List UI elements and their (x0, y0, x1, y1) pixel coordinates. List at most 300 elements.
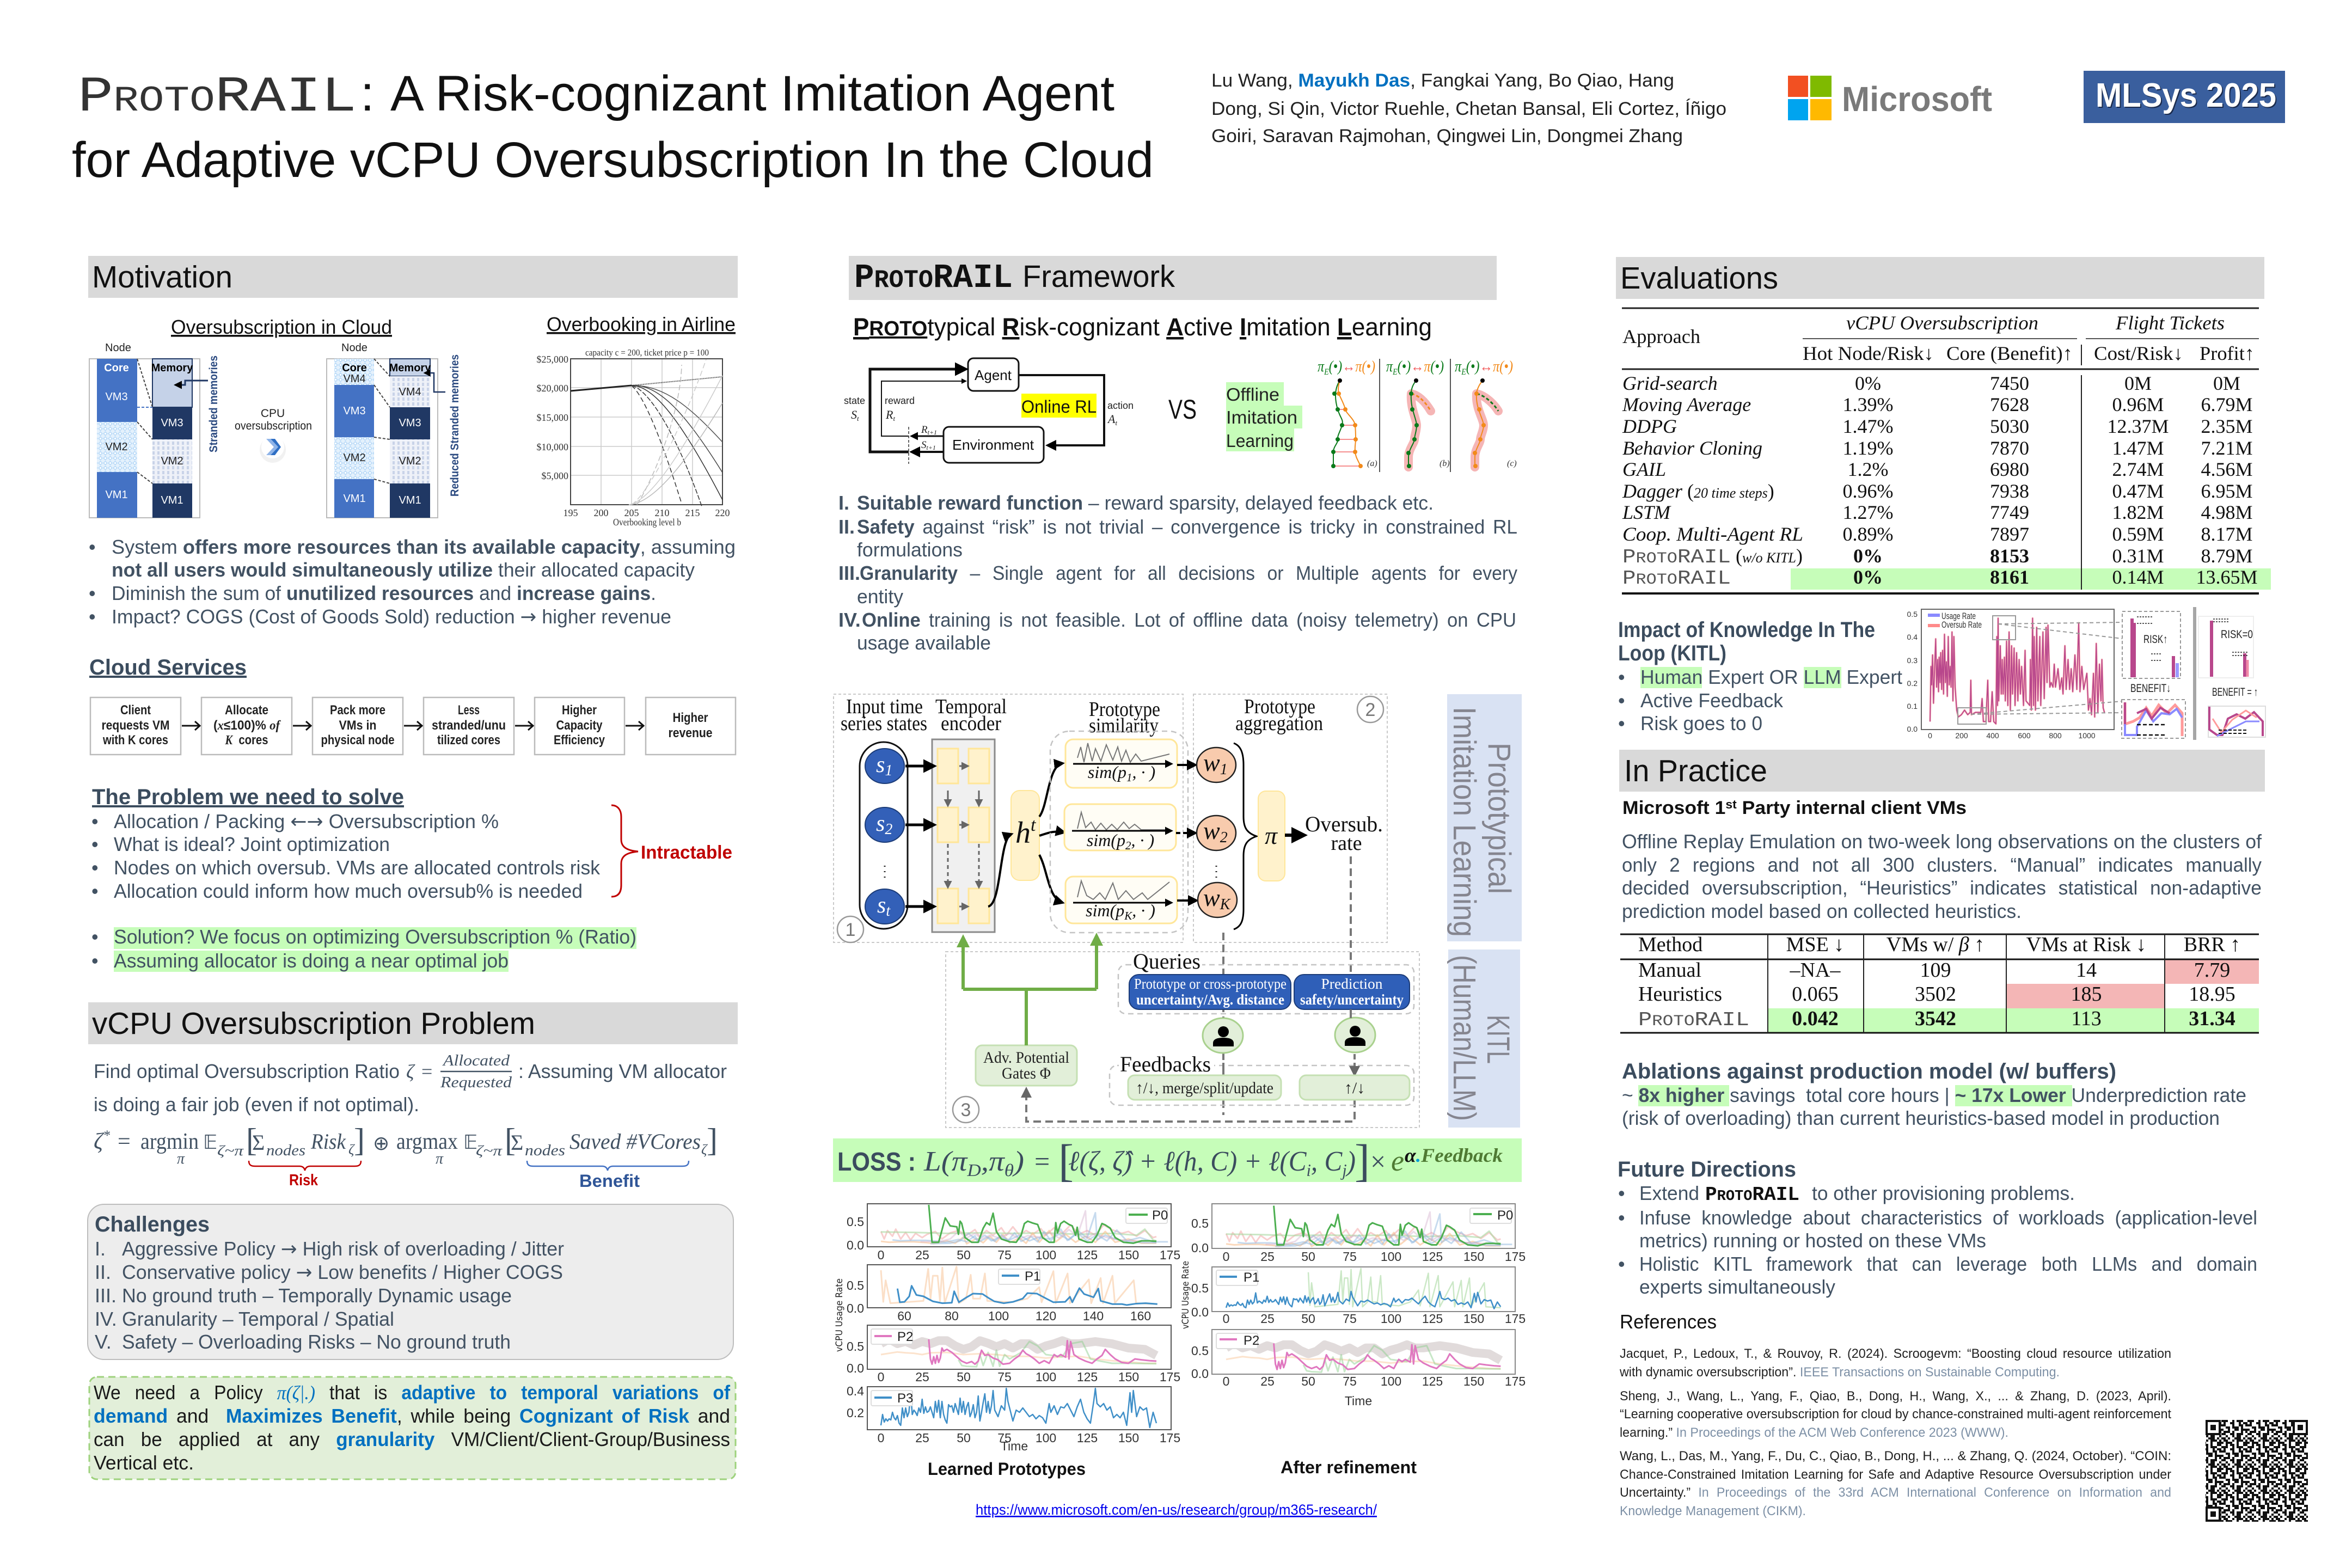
callout: policy requirement: Vertical etc. (94, 1451, 194, 1474)
chart: usage vs oversub rate: 600 (2018, 731, 2031, 740)
text block: future directions: to other provisioning problems. (1812, 1182, 2075, 1204)
table: in practice results: 18.95 (2189, 983, 2235, 1006)
text block: problem definition: : Assuming VM allocator (518, 1060, 727, 1082)
diagram: prototypical imitation learning architecture: sim(p (1086, 901, 1124, 920)
formula: objective: [ (505, 1122, 516, 1158)
title: for Adaptive vCPU Oversubscription In the Cloud (72, 132, 1154, 188)
diagram: oversubscription in cloud: Reduced Stranded memories (449, 354, 461, 497)
chart: refined P0: 0 (1223, 1250, 1229, 1264)
diagram: prototypical imitation learning architecture: t (1031, 815, 1037, 835)
chart group: learned prototypes: Learned Prototypes (928, 1459, 1086, 1479)
chart: P1: 100 (988, 1309, 1009, 1323)
diagram: prototypical imitation learning architecture: , · ) (1132, 762, 1155, 782)
chart: refined P2: 175 (1505, 1374, 1526, 1388)
table: evaluation results: 0.59M (2112, 523, 2164, 545)
diagram: online RL loop: t (893, 414, 895, 422)
diagram: oversubscription in cloud: Oversubscription in Cloud (171, 316, 392, 338)
heading: in practice (1619, 750, 2265, 792)
table: evaluation results: 1.39% (1842, 394, 1894, 415)
chart: refined P0: 25 (1260, 1250, 1275, 1264)
label: offline imitation learning: Imitation (1226, 407, 1297, 427)
table: in practice results: MSE ↓ (1786, 933, 1844, 956)
diagram: oversubscription in cloud: Node (105, 342, 131, 354)
flow: cloud services chain: Capacity (556, 718, 603, 733)
diagram: imitation trajectories: (•) (1466, 358, 1480, 375)
flow: cloud services chain: Client (120, 703, 151, 718)
chart: refined P1: P1 (1244, 1270, 1259, 1285)
chart group: after refinement: vCPU Usage Rate (1180, 1261, 1191, 1329)
table: evaluation results: 2.74M (2112, 458, 2164, 480)
table: evaluation results: Grid-search (1622, 372, 1718, 394)
chart: refined P2: 150 (1463, 1374, 1484, 1388)
formula: LOSS: LOSS : (837, 1148, 916, 1177)
table: in practice results: VMs at Risk ↓ (2026, 933, 2146, 956)
chart: usage vs oversub rate: 0.0 (1907, 725, 1918, 733)
text block: impact of KITL: Risk goes to 0 (1640, 712, 1762, 734)
table: evaluation results: 0M (2213, 372, 2240, 394)
chart: refined P0: 75 (1343, 1250, 1357, 1264)
label: offline imitation learning (1226, 382, 1302, 451)
flow: cloud services chain: Less (458, 703, 480, 718)
panel: evaluations (1616, 257, 2271, 740)
chart: refined P2: 25 (1260, 1374, 1275, 1388)
annotation: risk brace: Risk (289, 1172, 318, 1189)
diagram: imitation trajectories: (c) (1507, 459, 1517, 468)
text block: offline replay description: decided oversubscription, “Heuristics” indicates statistical non-adaptive (1622, 877, 2262, 899)
formula: objective: nodes (266, 1142, 305, 1159)
text block: framework challenges: Online training is not feasible. Lot of offline data (noisy telemetry) on CPU (862, 609, 1516, 631)
diagram: knowledge in the loop: Feedbacks (1120, 1052, 1211, 1076)
table: evaluation results: Profit↑ (2200, 342, 2255, 364)
text block: references: Jacquet, P., Ledoux, T., & Rouvoy, R. (2024). Scroogevm: “Boosting cloud resource utilization (1620, 1346, 2171, 1361)
chart: refined P0: 100 (1381, 1250, 1401, 1264)
diagram: prototypical imitation learning architecture: sim(p (1087, 830, 1125, 850)
text block: motivation bullets: • (89, 605, 96, 628)
chart: P2: 0 (878, 1370, 884, 1384)
table: in practice results: 113 (2071, 1007, 2102, 1030)
title: PROTO RAIL (78, 69, 357, 126)
diagram: prototypical imitation learning architecture: w (1203, 749, 1220, 776)
chart group: learned prototypes (834, 1204, 1180, 1479)
diagram: prototypical imitation learning architecture: 1 (1126, 771, 1132, 784)
chart: refined P1: 25 (1260, 1312, 1275, 1326)
label: KITL (1447, 950, 1520, 1128)
diagram: prototypical imitation learning architecture: Oversub. (1305, 812, 1383, 836)
chart: P1: 120 (1036, 1309, 1056, 1323)
text block: references: learning.” In Proceedings of the ACM Web Conference 2023 (WWW). (1620, 1425, 2008, 1440)
table: evaluation results: Coop. Multi-Agent RL (1622, 523, 1803, 545)
chart: overbooking in airline: $20,000 (537, 383, 568, 394)
chart: refined P0: 175 (1505, 1250, 1526, 1264)
formula: LOSS: π (989, 1146, 1003, 1177)
table: evaluation results: vCPU Oversubscription (1846, 312, 2038, 334)
chart: usage vs oversub rate: 0.1 (1907, 702, 1918, 710)
chart: overbooking in airline: 200 (593, 507, 609, 518)
diagram: prototypical imitation learning architecture: , · ) (1131, 830, 1154, 850)
chart: refined P0: 150 (1463, 1250, 1484, 1264)
chart: overbooking in airline: 220 (715, 507, 730, 518)
chart: refined P1: 0.5 (1191, 1281, 1209, 1295)
chart: overbooking in airline: $15,000 (537, 412, 568, 423)
formula: LOSS: ℓ(ζ, ζ̂) + ℓ(h, C) + ℓ(C (1068, 1146, 1307, 1177)
chart group: learned prototypes: vCPU Usage Rate (834, 1278, 845, 1352)
diagram: prototypical imitation learning architecture: 1 (846, 920, 855, 940)
diagram: online RL loop: S (921, 439, 927, 451)
flow: cloud services chain: Higher (562, 703, 597, 718)
chart: zoomed risk and benefit after KITL (2198, 616, 2265, 737)
text block: future directions: Future Directions (1618, 1157, 1796, 1181)
diagram: oversubscription in cloud: VM3 (343, 405, 366, 417)
table: evaluation results: Core (Benefit)↑ (1946, 342, 2073, 364)
diagram: prototypical imitation learning architecture: s (876, 752, 885, 777)
chart: P3: 125 (1077, 1431, 1098, 1445)
formula: objective: ζ (348, 1142, 355, 1157)
table: in practice results: Manual (1638, 959, 1701, 982)
diagram: prototypical imitation learning architecture: K (1124, 909, 1132, 922)
flow: cloud services chain: VMs in (339, 718, 377, 733)
chart: P0: 0.5 (847, 1215, 864, 1229)
chart: P3: 100 (1036, 1431, 1056, 1445)
panel: challenges: IV. (95, 1308, 117, 1330)
chart: P2: 50 (957, 1370, 971, 1384)
table: evaluation results: 7450 (1990, 372, 2029, 394)
chart group: after refinement (1180, 1204, 1526, 1477)
chart group: after refinement: Time (1345, 1394, 1372, 1408)
text block: future directions: metrics) running or hosted on these VMs (1639, 1229, 1986, 1252)
formula: objective: ζ~π (217, 1143, 244, 1159)
formula: objective: * (103, 1128, 110, 1143)
text block: impact of KITL: • (1618, 666, 1625, 688)
table: in practice results: 185 (2071, 983, 2102, 1006)
table: evaluation results: 0M (2124, 372, 2152, 394)
table: in practice results: 109 (1920, 959, 1951, 982)
diagram: online RL loop: Agent (975, 367, 1012, 383)
diagram: online RL loop: action (1107, 400, 1134, 411)
diagram: prototypical imitation learning architecture: aggregation (1235, 712, 1323, 735)
chart: refined P1: 125 (1422, 1312, 1443, 1326)
table: evaluation results: 4.56M (2201, 458, 2253, 480)
text block: solution highlights: Solution? We focus on optimizing Oversubscription % (Ratio) (114, 926, 636, 948)
diagram: oversubscription in cloud: Memory (389, 362, 431, 374)
chart: P2: 0.0 (847, 1361, 864, 1375)
table: evaluation results: 7938 (1990, 480, 2029, 502)
title: : (360, 66, 375, 121)
panel: challenges (88, 1204, 733, 1359)
text block: problem definition (94, 1052, 727, 1116)
diagram: prototypical imitation learning architecture: 2 (1365, 700, 1375, 720)
text block: motivation bullets: • (89, 536, 96, 558)
chart: usage vs oversub rate (1907, 609, 2122, 740)
heading: evaluations (1616, 257, 2264, 299)
chart: refined P2 (1191, 1330, 1526, 1388)
formula: objective: 𝔼 (463, 1131, 477, 1154)
table: evaluation results: Approach (1622, 326, 1700, 347)
diagram: imitation trajectories: π (1455, 358, 1462, 375)
text block: references: “Learning cooperative oversubscription for cloud by chance-constrained multi-agent reinforcement (1620, 1407, 2171, 1422)
diagram: prototypical imitation learning architecture: Prototype (1244, 695, 1315, 718)
diagram: prototypical imitation learning architecture: w (1203, 817, 1220, 844)
formula: LOSS: i (1307, 1160, 1311, 1180)
panel: vCPU oversubscription problem (88, 1002, 738, 1479)
formula: LOSS: = (1034, 1146, 1050, 1177)
diagram: oversubscription in cloud: Stranded memories (207, 356, 220, 452)
text block: future directions: • (1618, 1182, 1625, 1204)
table: evaluation results: 7870 (1990, 437, 2029, 459)
chart: P3: 150 (1118, 1431, 1139, 1445)
panel: challenges: Safety – Overloading Risks – No ground truth (122, 1331, 511, 1353)
text block: solution highlights: • (91, 926, 99, 948)
chart: usage vs oversub rate: 800 (2049, 731, 2062, 740)
formula: objective: [ (246, 1122, 257, 1158)
chart: usage vs oversub rate: 0 (1928, 731, 1932, 740)
chart: P3: 25 (915, 1431, 929, 1445)
formula: objective: π (177, 1150, 185, 1167)
flow: cloud services chain: Allocate (225, 703, 268, 718)
text block: impact of KITL: • (1618, 689, 1625, 712)
diagram: prototypical imitation learning architecture: 2 (1220, 829, 1228, 846)
diagram: prototypical imitation learning architecture: Temporal (935, 695, 1007, 718)
diagram: imitation trajectories: (a) (1367, 459, 1377, 468)
chart: refined P1: 100 (1381, 1312, 1401, 1326)
text block: problem definition: = (421, 1061, 432, 1082)
diagram: knowledge in the loop: Adv. Potential (983, 1049, 1069, 1067)
diagram: prototypical imitation learning architecture: sim(p (1088, 762, 1126, 782)
text block: framework challenges: entity (857, 585, 903, 608)
panel: challenges: Granularity – Temporal / Spatial (122, 1308, 394, 1330)
text block: framework challenges: I. (838, 492, 849, 514)
text block: framework challenges (838, 492, 1517, 654)
authors: Dong, Si Qin, Victor Ruehle, Chetan Bansal, Eli Cortez, Íñigo (1211, 99, 1726, 119)
text block: the problem we need to solve: Allocation could inform how much oversub% is needed (114, 880, 583, 902)
formula: LOSS: e (1391, 1144, 1404, 1177)
diagram: online RL loop: t+1 (928, 428, 937, 436)
table: in practice results: –NA– (1790, 959, 1841, 982)
heading: vCPU oversubscription problem: vCPU Oversubscription Problem (92, 1006, 535, 1041)
text block: future directions: • (1618, 1253, 1625, 1275)
chart: P0: 150 (1118, 1248, 1139, 1262)
chart: refined P1: 175 (1505, 1312, 1526, 1326)
text block: future directions: PROTORAIL (1705, 1184, 1799, 1206)
table: evaluation results: 0% (1853, 545, 1883, 567)
formula: objective: argmin (140, 1129, 199, 1154)
table: evaluation results: 6980 (1990, 458, 2029, 480)
chart: refined P1: 50 (1301, 1312, 1315, 1326)
text block: solution highlights (91, 926, 636, 972)
panel: challenges: III. (95, 1284, 117, 1307)
subheading: first party VMs: st (1725, 798, 1737, 811)
text block: solution highlights: Assuming allocator is doing a near optimal job (114, 950, 509, 972)
text block: references: Uncertainty.” In Proceedings of the 33rd ACM International Conference on Information and (1620, 1485, 2171, 1500)
formula: LOSS: , (1311, 1146, 1318, 1177)
table: in practice results: BRR ↑ (2184, 933, 2240, 956)
text block: references: Chance-Constrained Imitation Learning for Safe and Adaptive Resource Oversubscription under (1620, 1467, 2171, 1482)
diagram: prototypical imitation learning architecture (834, 694, 1387, 942)
table: evaluation results: 12.37M (2107, 415, 2169, 437)
formula: LOSS: θ (1004, 1160, 1014, 1180)
label: KITL: KITL (1480, 1015, 1516, 1064)
formula: objective: ζ~π (476, 1143, 503, 1159)
table: evaluation results: 0.96% (1842, 480, 1894, 502)
diagram: knowledge in the loop: Gates Φ (1002, 1064, 1051, 1082)
diagram: oversubscription in cloud: VM3 (161, 417, 183, 429)
chart: P1: 140 (1083, 1309, 1104, 1323)
panel: ProtoRAIL framework (833, 256, 1526, 1518)
label: offline imitation learning: Offline (1226, 384, 1279, 405)
formula: objective: 𝔼 (203, 1131, 217, 1154)
table: evaluation results: 8.17M (2201, 523, 2253, 545)
text block: the problem we need to solve: • (91, 856, 99, 879)
diagram: knowledge in the loop: uncertainty/Avg. distance (1136, 991, 1284, 1008)
diagram: imitation trajectories: ↔π(•) (1480, 358, 1516, 375)
chart: refined P2: 0.0 (1191, 1367, 1209, 1381)
text block: the problem we need to solve: Allocation / Packing ←→ Oversubscription % (114, 810, 499, 833)
flow: cloud services chain: Higher (673, 710, 708, 725)
table: evaluation results: (w/o KITL) (1736, 545, 1803, 567)
text block: framework challenges: Granularity – Single agent for all decisions or Multiple agents for every (860, 562, 1517, 584)
heading: vCPU oversubscription problem (88, 1002, 738, 1044)
text block: future directions: • (1618, 1206, 1625, 1229)
chart: overbooking in airline: Overbooking level b (613, 517, 681, 528)
formula: objective: nodes (525, 1142, 565, 1159)
diagram: imitation trajectories: (•) (1398, 358, 1411, 375)
table: in practice results: 31.34 (2189, 1007, 2235, 1030)
diagram: online RL loop: R (886, 408, 893, 421)
text block: framework challenges: III. (838, 562, 860, 584)
table: evaluation results: 6.79M (2201, 394, 2253, 415)
text block: framework challenges: Suitable reward function – reward sparsity, delayed feedback etc. (857, 492, 1434, 514)
chart: P0: 125 (1077, 1248, 1098, 1262)
text block: framework challenges: formulations (857, 538, 963, 561)
formula: LOSS: α.Feedback (1405, 1144, 1503, 1166)
formula: LOSS: ) (1012, 1146, 1024, 1177)
text block: the problem we need to solve: The Problem we need to solve (92, 785, 404, 809)
table: evaluation results: 8.79M (2201, 545, 2253, 567)
text block: impact of KITL: Loop (KITL) (1618, 641, 1726, 665)
flow: cloud services chain: Efficiency (554, 733, 605, 748)
text block: future directions: Extend (1639, 1182, 1699, 1204)
diagram: prototypical imitation learning architecture: t (886, 903, 891, 920)
text block: motivation bullets: not all users would simultaneously utilize their allocated capacity (112, 559, 695, 581)
text block: impact of KITL (1618, 618, 1902, 734)
heading: motivation (88, 256, 738, 298)
panel: challenges: Aggressive Policy → High risk of overloading / Jitter (122, 1238, 564, 1260)
text block: ablations: (risk of overloading) than current heuristics-based model in production (1622, 1107, 2220, 1129)
diagram: imitation trajectories: ↔π(•) (1411, 358, 1446, 375)
diagram: online RL loop: state (844, 395, 865, 406)
table: evaluation results: 0.47M (2112, 480, 2164, 502)
chart: zoomed risk and benefit before KITL: BENEFIT↓ (2130, 682, 2171, 695)
flow: cloud services chain: revenue (669, 726, 712, 740)
chart: refined P2: 0.5 (1191, 1344, 1209, 1358)
chart: overbooking in airline: capacity c = 200, ticket price p = 100 (585, 347, 709, 358)
table: evaluation results: Flight Tickets (2115, 312, 2225, 334)
table: evaluation results: 0.96M (2112, 394, 2164, 415)
chart: P3: 0 (878, 1431, 884, 1445)
annotation: benefit brace: Benefit (579, 1171, 640, 1191)
text block: references: with dynamic oversubscription”. IEEE Transactions on Sustainable Computing. (1619, 1365, 2060, 1380)
panel: challenges: Challenges (95, 1212, 210, 1236)
table: evaluation results: 7749 (1990, 501, 2029, 523)
chart: refined P2: 50 (1301, 1374, 1315, 1388)
authors: Lu Wang, Mayukh Das, Fangkai Yang, Bo Qiao, Hang (1211, 70, 1674, 91)
text block: references (1619, 1310, 2171, 1518)
chart: overbooking in airline: $25,000 (537, 354, 568, 365)
chart: P0: P0 (1152, 1208, 1168, 1223)
diagram: oversubscription in cloud: oversubscription (235, 420, 312, 432)
chart: P1: 0.5 (847, 1278, 864, 1293)
chart: P3: 0.4 (847, 1384, 864, 1398)
label: offline imitation learning: Learning (1226, 431, 1294, 451)
text block: future directions: experts simultaneously (1639, 1276, 1835, 1298)
formula: LOSS: , (981, 1146, 989, 1177)
table: evaluation results: Moving Average (1622, 394, 1751, 415)
heading: evaluations: Evaluations (1620, 261, 1778, 296)
text block: motivation bullets: Impact? COGS (Cost of Goods Sold) reduction → higher revenue (112, 605, 671, 628)
chart: P0: 0.0 (847, 1238, 864, 1252)
chart: usage vs oversub rate: 200 (1955, 731, 1968, 740)
diagram: imitation trajectories: E (1324, 367, 1329, 377)
table: in practice results: Heuristics (1638, 983, 1722, 1006)
panel: challenges: I. (95, 1238, 106, 1260)
label: KITL: (Human/LLM) (1447, 955, 1482, 1121)
chart: P2: 150 (1118, 1370, 1139, 1384)
diagram: prototypical imitation learning architecture: s (876, 811, 885, 836)
link: research group URL: https://www.microsoft.com/en-us/research/group/m365-research/ (976, 1502, 1377, 1518)
chart: usage vs oversub rate: Usage Rate (1941, 611, 1976, 621)
table: evaluation results: 7628 (1990, 394, 2029, 415)
chart: P3 (847, 1384, 1180, 1453)
text block: problem definition: Requested (440, 1074, 512, 1091)
flow: cloud services chain: stranded/unu (432, 718, 506, 733)
diagram: prototypical imitation learning architecture: 2 (1125, 839, 1131, 852)
chart: usage vs oversub rate: 0.4 (1907, 633, 1918, 641)
text block: ablations: ~ 8x higher savings total core hours | ~ 17x Lower Underprediction rate (1622, 1084, 2246, 1106)
chart: overbooking in airline: 195 (563, 507, 578, 518)
diagram: online RL loop: Online RL (1021, 397, 1097, 416)
diagram: oversubscription in cloud: VM4 (343, 373, 366, 385)
flow: cloud services chain: K cores (225, 733, 268, 748)
formula: objective (94, 1122, 718, 1167)
diagram: online RL loop: R (921, 424, 928, 436)
chart: P2: 75 (997, 1370, 1012, 1384)
chart: refined P2: P2 (1244, 1333, 1259, 1348)
chart: refined P1: 150 (1463, 1312, 1484, 1326)
chart: usage vs oversub rate: 0.2 (1907, 679, 1918, 688)
diagram: knowledge in the loop: safety/uncertainty (1300, 991, 1404, 1008)
text block: problem definition: ζ (406, 1061, 415, 1082)
text block: motivation bullets: • (89, 582, 96, 604)
table: in practice results: 14 (2076, 959, 2097, 982)
table: evaluation results: 13.65M (2196, 566, 2258, 588)
chart: P2: 0.5 (847, 1339, 864, 1353)
authors (1211, 70, 1726, 146)
subheading: prototypical risk-cognizant active imitation learning: PROTOtypical Risk-cognizant Active Imitation Learning (853, 313, 1432, 341)
chart: P1: P1 (1025, 1269, 1040, 1284)
chart: P2: 125 (1077, 1370, 1098, 1384)
diagram: oversubscription in cloud: VM1 (343, 493, 366, 505)
diagram: prototypical imitation learning architecture: Prototype (1089, 698, 1160, 721)
table: evaluation results: 4.98M (2201, 501, 2253, 523)
diagram: imitation trajectories: π (1318, 358, 1325, 375)
table: in practice results: 7.79 (2194, 959, 2230, 982)
text block: impact of KITL: Human Expert OR LLM Expert (1640, 666, 1902, 688)
chart: refined P2: 100 (1381, 1374, 1401, 1388)
table: in practice results: VMs w/ β ↑ (1886, 933, 1984, 956)
chart: zoomed risk and benefit after KITL: BENEFIT = ↑ (2212, 686, 2258, 699)
formula: objective: Σ (252, 1130, 265, 1155)
formula: objective: ζ (701, 1142, 708, 1157)
diagram: oversubscription in cloud: CPU (261, 407, 285, 420)
